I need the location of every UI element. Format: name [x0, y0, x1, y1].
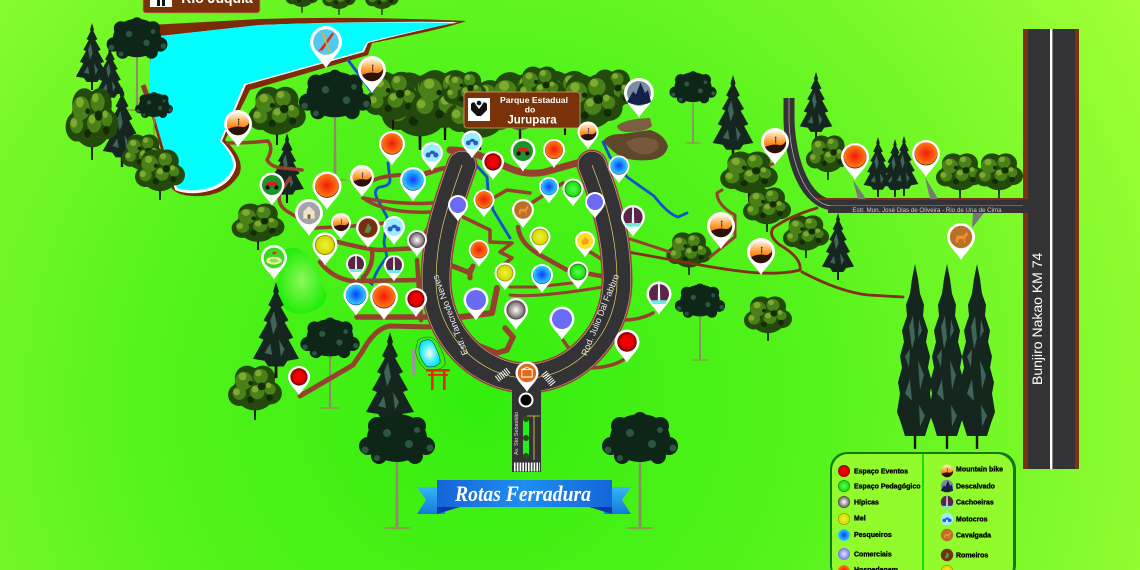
legend: left column: Mel	[854, 516, 866, 522]
pin connector stubs	[853, 177, 984, 228]
legend: right column: Cachoeiras	[956, 500, 994, 506]
pin: mountain bike	[747, 238, 775, 275]
pin: comercial	[464, 288, 488, 321]
legend: left column: Pesqueiros	[854, 532, 892, 539]
pin: romeiros	[356, 216, 380, 248]
legend: left column: Espaço Pedagógico	[854, 484, 921, 490]
legend: right column: Romeiros	[956, 552, 988, 560]
pin: orange	[543, 139, 565, 168]
pin: comercial	[448, 195, 468, 222]
sign: Parque Estadual do Jurupara: Jurupara	[507, 114, 557, 126]
crosswalks on horseshoe	[497, 370, 553, 384]
pin: golf	[261, 245, 287, 279]
pin: evento	[405, 288, 427, 317]
side road: Estr. Mun. José Dias de Oliveira: Estr. Mun. José Dias de Oliveira - Rio de Una de Cima	[852, 207, 1002, 214]
pin: motocross	[383, 216, 405, 245]
rivers	[348, 60, 687, 284]
pin: cavalgada	[512, 199, 534, 228]
legend: left column: Comerciais	[854, 552, 892, 558]
pin: mountain bike	[578, 122, 598, 149]
legend: left column	[838, 465, 921, 570]
pin: comercial	[585, 192, 605, 218]
road stem: Av. Sto Sebastião: Av. Sto Sebastião	[514, 412, 520, 455]
pond	[416, 337, 445, 370]
pin: evento	[288, 366, 310, 395]
gate: torii	[426, 369, 450, 390]
pin: mountain bike	[224, 110, 252, 147]
trees: left grove and top row	[66, 0, 399, 200]
highway: Bunjiro Nakao KM 74	[1023, 29, 1079, 469]
legend: left column: Hípicas	[854, 500, 879, 506]
pin: mountain bike	[707, 212, 735, 249]
road stem: Av. Sto Sebastião	[512, 384, 541, 472]
sign: Parque Estadual do Jurupara: Parque Estadual	[500, 95, 568, 105]
pin: buggy	[260, 172, 284, 206]
legend: right column: Motocros	[956, 516, 988, 524]
trails	[228, 141, 903, 396]
sign: Rio Juquiá	[143, 0, 260, 13]
trees: forest behind park sign	[364, 66, 636, 150]
pin: orange	[474, 190, 494, 217]
banner: Rotas Ferradura: Rotas Ferradura	[454, 481, 591, 506]
pin: pesqueiro	[539, 177, 559, 204]
pin: cachoeira	[346, 254, 366, 280]
pin: mel	[530, 226, 550, 254]
pin: orange	[312, 172, 342, 210]
lake	[143, 18, 466, 196]
pin: motocross	[421, 142, 443, 171]
road label: Rod. Julio Dal Fabbro: Rod. Julio Dal Fabbro	[579, 273, 621, 357]
pins	[224, 26, 975, 395]
pin: orange	[379, 131, 405, 165]
pin: mel	[494, 262, 516, 290]
legend: right column: Cavalgada	[956, 532, 991, 540]
pin: pesqueiro	[531, 264, 553, 293]
pin: comercial	[550, 306, 574, 340]
pin: church	[295, 199, 323, 236]
trees: araucaria in park	[228, 70, 725, 529]
pin: hipica	[504, 298, 528, 330]
highway: Bunjiro Nakao KM 74: Bunjiro Nakao KM 74	[1029, 252, 1045, 385]
pin: mountain bike	[350, 165, 374, 197]
side road: Estr. Mun. José Dias de Oliveira	[789, 98, 1026, 214]
pin: cachoeira	[621, 205, 645, 237]
pin: pedagogico	[562, 178, 584, 206]
sign: Parque Estadual do Jurupara: do	[525, 104, 535, 114]
roundabout	[518, 392, 534, 408]
pin: pedagogico	[568, 262, 588, 289]
pin: orange	[912, 140, 940, 177]
pin: mountain bike	[358, 56, 386, 93]
sign: Parque Estadual do Jurupara	[464, 92, 580, 128]
gray marker bar	[412, 350, 416, 375]
pin: hipica	[407, 230, 427, 256]
boulder rock	[603, 118, 668, 160]
pin: mel	[312, 232, 338, 266]
legend: left column: Espaço Eventos	[854, 468, 908, 476]
horseshoe road	[436, 165, 617, 378]
pin: orange	[469, 240, 489, 267]
pin: cachoeira	[646, 282, 672, 315]
pin: motocross	[462, 130, 482, 158]
pin: kayak	[310, 26, 342, 68]
trees: right side	[666, 72, 1023, 449]
pin: evento	[482, 151, 504, 180]
legend: right column	[941, 465, 1003, 570]
pin: pesqueiro	[344, 282, 368, 316]
pin: buggy	[510, 138, 536, 172]
pin: pesqueiro	[608, 156, 630, 183]
pin: mountain bike	[761, 128, 789, 165]
pin: evento	[614, 330, 640, 363]
pin: descalvado	[624, 78, 654, 118]
green meadow blob	[277, 248, 327, 314]
pin: cavalgada	[947, 223, 975, 260]
pin: orange	[841, 143, 869, 180]
pin: mountain bike	[331, 213, 351, 240]
pin: pesqueiro	[400, 167, 426, 201]
legend: right column: Descalvado	[956, 484, 995, 490]
pin: orange	[370, 283, 398, 320]
road label: Estr. Tancredo Neves: Estr. Tancredo Neves	[430, 273, 470, 357]
pin: shop	[516, 362, 538, 392]
legend panel	[830, 452, 1016, 570]
banner: Rotas Ferradura	[417, 480, 631, 514]
pin: cachoeira	[384, 255, 404, 282]
legend: right column: Mountain bike	[956, 466, 1003, 474]
pin: honey	[575, 231, 595, 258]
